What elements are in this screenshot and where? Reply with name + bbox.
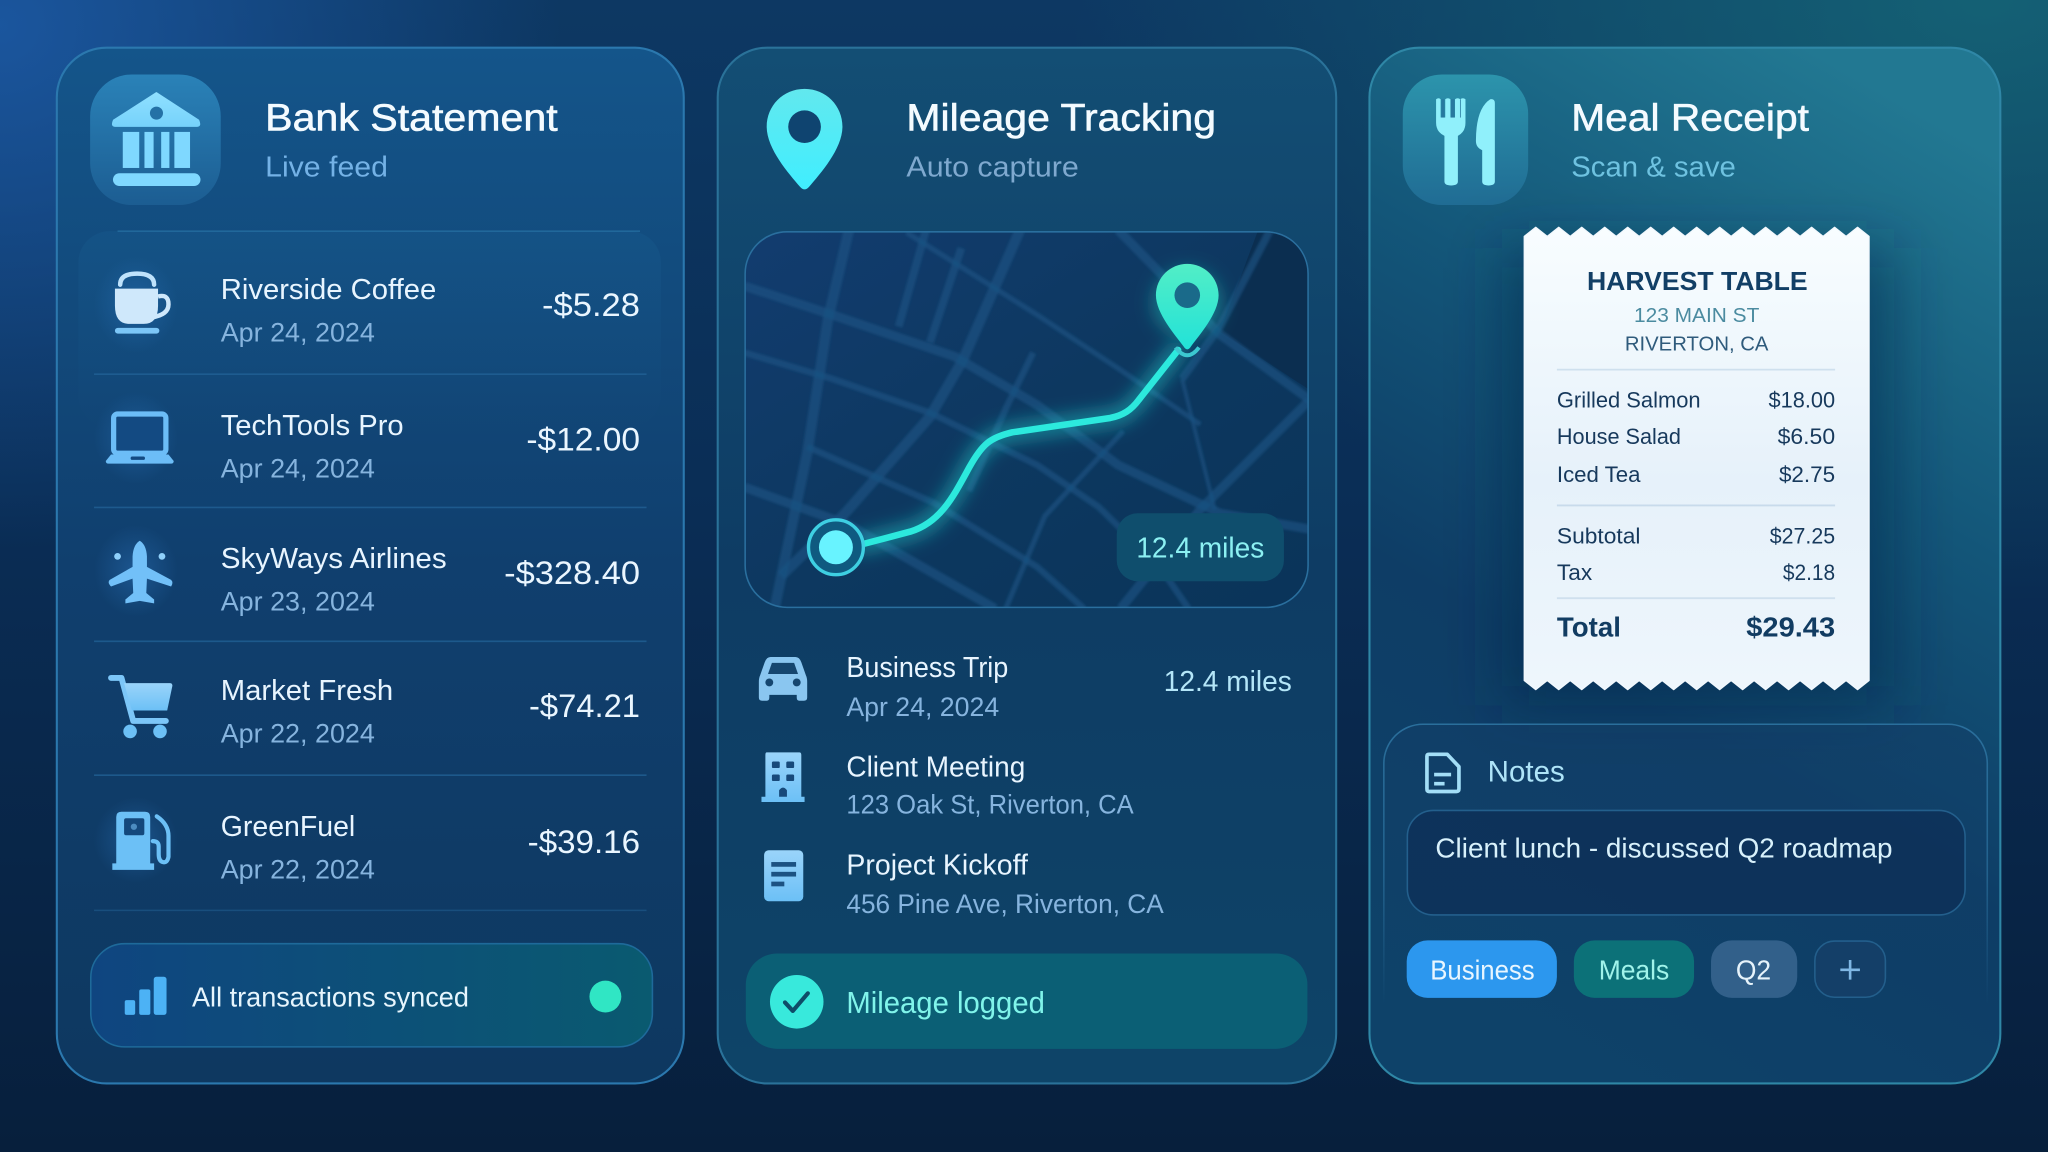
icon: car <box>759 657 807 701</box>
restaurant address <box>1625 305 1769 356</box>
line items: House Salad <box>1557 424 1681 449</box>
transaction list background <box>78 231 661 427</box>
subheading: scan and save: Scan & save <box>1571 151 1736 183</box>
date: Apr 22, 2024 <box>221 854 375 884</box>
notes heading: Notes <box>1488 756 1565 789</box>
restaurant address: RIVERTON, CA <box>1625 334 1769 356</box>
total: Total <box>1557 612 1621 643</box>
heading: bank statement: Bank Statement <box>265 98 558 140</box>
line items: $2.75 <box>1779 462 1835 487</box>
amount: -$5.28 <box>542 286 640 323</box>
merchant: TechTools Pro <box>221 410 404 442</box>
icon: note document <box>1427 754 1459 792</box>
address: 123 Oak St, Riverton, CA <box>846 790 1134 820</box>
total: $29.43 <box>1746 612 1835 643</box>
status dot <box>589 981 621 1013</box>
tag: meals: Meals <box>1599 955 1669 986</box>
heading: meal receipt: Meal Receipt <box>1571 98 1809 140</box>
map with route <box>744 230 1311 609</box>
transaction: riverside coffee <box>94 256 640 353</box>
merchant: GreenFuel <box>221 811 355 843</box>
panel: mileage tracking <box>718 48 1336 1083</box>
address: 456 Pine Ave, Riverton, CA <box>846 889 1164 919</box>
subtotal and tax: Subtotal <box>1557 523 1640 548</box>
icon: fork and knife tile <box>1403 74 1528 205</box>
distance: 12.4 miles <box>1164 666 1292 698</box>
date: Apr 24, 2024 <box>846 692 999 722</box>
icon: document <box>764 850 803 901</box>
status bar: all transactions synced <box>91 944 652 1047</box>
icon: bar chart <box>125 977 167 1015</box>
icon: location pin <box>767 89 842 189</box>
date: Apr 22, 2024 <box>221 719 375 749</box>
icon: airplane <box>94 525 178 616</box>
add tag button <box>1815 941 1885 997</box>
amount: -$328.40 <box>504 554 640 591</box>
tag: business: Business <box>1430 955 1535 986</box>
panel: meal receipt <box>1369 48 2000 1083</box>
date: Apr 23, 2024 <box>221 587 375 617</box>
subheading: auto capture: Auto capture <box>906 151 1079 183</box>
trip: business trip <box>759 652 1292 722</box>
line items: $18.00 <box>1768 388 1835 413</box>
status bar: mileage logged <box>746 953 1307 1049</box>
subtotal and tax: Tax <box>1557 560 1592 585</box>
notes panel <box>1384 724 1987 1066</box>
line items: $6.50 <box>1778 424 1835 449</box>
transaction: greenfuel <box>94 797 640 884</box>
subheading: live feed: Live feed <box>265 151 388 183</box>
icon: fuel pump <box>94 797 178 883</box>
restaurant name: HARVEST TABLE <box>1587 266 1808 296</box>
tag: business <box>1407 940 1557 998</box>
subtotal and tax: $27.25 <box>1770 523 1835 548</box>
icon: coffee cup <box>94 256 178 353</box>
date: Apr 24, 2024 <box>221 453 375 483</box>
panel: bank statement <box>57 48 684 1083</box>
transaction: techtools pro <box>94 392 640 483</box>
amount: -$74.21 <box>529 687 640 724</box>
amount: -$12.00 <box>526 421 640 458</box>
trip: project kickoff <box>764 849 1164 919</box>
icon: shopping cart <box>111 678 172 738</box>
status text: All transactions synced <box>192 981 469 1012</box>
icon: building <box>761 752 805 802</box>
title: Project Kickoff <box>846 849 1029 881</box>
subtotal and tax <box>1557 523 1835 585</box>
note text box: Client lunch - discussed Q2 roadmap <box>1435 832 1893 863</box>
start marker <box>808 520 863 575</box>
tag: q2 <box>1711 940 1797 998</box>
note text box <box>1407 810 1965 915</box>
line items: Iced Tea <box>1557 462 1641 487</box>
destination pin <box>1153 264 1221 355</box>
amount: -$39.16 <box>528 823 640 860</box>
heading: mileage tracking: Mileage Tracking <box>906 98 1216 140</box>
icon: laptop <box>94 392 178 483</box>
receipt <box>1502 227 1894 705</box>
total <box>1557 612 1835 643</box>
restaurant address: 123 MAIN ST <box>1634 305 1759 327</box>
merchant: Riverside Coffee <box>221 274 436 306</box>
merchant: Market Fresh <box>221 675 393 707</box>
icon: bank tile <box>90 74 221 205</box>
subtotal and tax: $2.18 <box>1783 560 1835 585</box>
status text: Mileage logged <box>846 985 1045 1020</box>
date: Apr 24, 2024 <box>221 318 375 348</box>
title: Client Meeting <box>846 751 1025 783</box>
merchant: SkyWays Airlines <box>221 543 447 575</box>
tag: q2: Q2 <box>1736 955 1771 986</box>
title: Business Trip <box>846 652 1008 684</box>
transaction: skyways airlines <box>94 525 640 617</box>
icon: check circle <box>770 975 824 1029</box>
tag: meals <box>1574 940 1694 998</box>
line items <box>1557 388 1835 487</box>
distance badge <box>1117 513 1284 581</box>
route line <box>861 350 1178 545</box>
distance badge: 12.4 miles <box>1136 533 1264 565</box>
line items: Grilled Salmon <box>1557 388 1701 413</box>
trip: client meeting <box>761 751 1134 820</box>
transaction: market fresh <box>111 675 640 749</box>
